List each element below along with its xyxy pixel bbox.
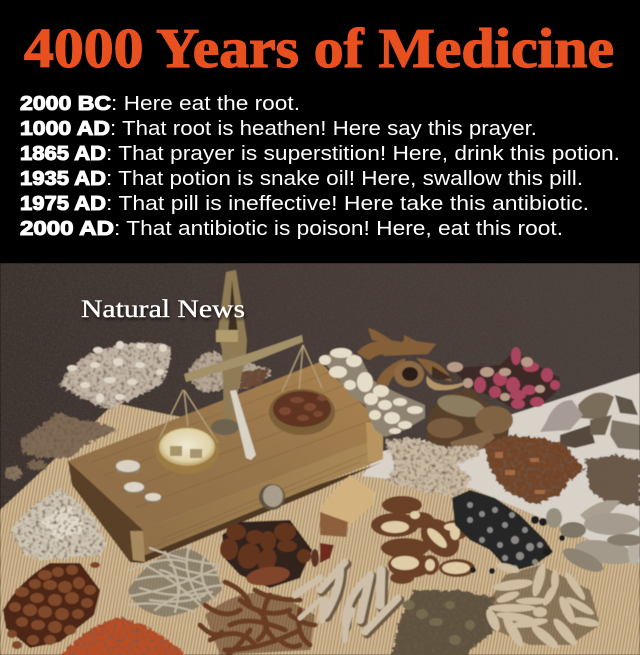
box top face xyxy=(68,362,383,530)
bamboo mat xyxy=(0,403,640,655)
line: 1935 AD: : That potion is snake oil! Here, swallow this pill. xyxy=(106,168,583,190)
brass weights xyxy=(116,460,161,502)
pile: dark seed pods xyxy=(220,520,319,588)
pile: dark root chunks xyxy=(425,388,513,455)
pile: white chips top left xyxy=(60,341,170,410)
line: 1975 AD: 1975 AD xyxy=(20,193,106,215)
line: 1935 AD: 1935 AD xyxy=(20,168,106,190)
pile: dark chunks left of box xyxy=(4,412,118,480)
pile: pale thin roots xyxy=(128,545,222,617)
pile: white shells xyxy=(319,348,425,437)
pile: pale gnarled roots xyxy=(295,562,400,640)
title: 4000 Years of Medicine xyxy=(24,18,614,80)
line: 1865 AD: : That prayer is superstition! Here, drink this potion. xyxy=(106,143,620,165)
pile: cream flat root pieces xyxy=(320,475,375,563)
spoon xyxy=(230,390,256,460)
photo panel: herbs and scale xyxy=(0,263,640,655)
box left face xyxy=(68,461,143,563)
dark wall background xyxy=(0,263,640,655)
scale beam xyxy=(184,335,303,382)
pile: mushroom slices xyxy=(371,496,475,584)
pile: brown seeds xyxy=(3,562,100,649)
pile: pale long roots xyxy=(483,561,600,652)
line: 2000 BC xyxy=(20,93,300,115)
pile: chips behind scale xyxy=(186,352,272,392)
right pan xyxy=(269,389,335,435)
white cloth xyxy=(362,373,640,563)
line: 1000 AD: : That root is heathen! Here say this prayer. xyxy=(110,118,537,140)
chains xyxy=(157,345,322,445)
pile: dark olive seeds xyxy=(390,590,495,655)
pile: pink rose buds xyxy=(447,347,560,410)
drawer knob xyxy=(259,484,285,510)
caption: Natural News: Natural News xyxy=(81,296,245,323)
pile: flat pale bark on cloth xyxy=(385,438,480,497)
balance scale xyxy=(155,270,335,474)
timeline text block xyxy=(20,93,620,240)
pile: brown root slices xyxy=(357,328,470,390)
left pan xyxy=(155,426,219,474)
pile: red saffron strands xyxy=(58,617,182,655)
line: 2000 BC: : Here eat the root. xyxy=(111,93,300,115)
box front face with drawer xyxy=(143,436,383,563)
scale column xyxy=(211,270,247,435)
line: 2000 AD: 2000 AD xyxy=(20,218,114,240)
pile: brown twisted roots xyxy=(200,582,315,655)
line: 1865 AD: 1865 AD xyxy=(20,143,106,165)
photo scene xyxy=(0,263,640,655)
pile: mixed pale chips xyxy=(10,488,106,560)
line: 1000 AD: 1000 AD xyxy=(20,118,110,140)
line: 1975 AD: : That pill is ineffective! Here take this antibiotic. xyxy=(106,193,589,215)
wooden box xyxy=(68,362,383,563)
pile: brown bark chips on cloth xyxy=(484,435,585,505)
line: 2000 BC: 2000 BC xyxy=(20,93,111,115)
line: 2000 AD: : That antibiotic is poison! Here, eat this root. xyxy=(114,218,563,240)
pile: grey-brown leaves xyxy=(540,392,640,450)
header panel xyxy=(20,18,620,240)
pile: grey seed shells xyxy=(546,500,640,577)
pile: black and grey peppercorns xyxy=(452,490,565,574)
pile: dark brown nuts xyxy=(585,455,640,505)
